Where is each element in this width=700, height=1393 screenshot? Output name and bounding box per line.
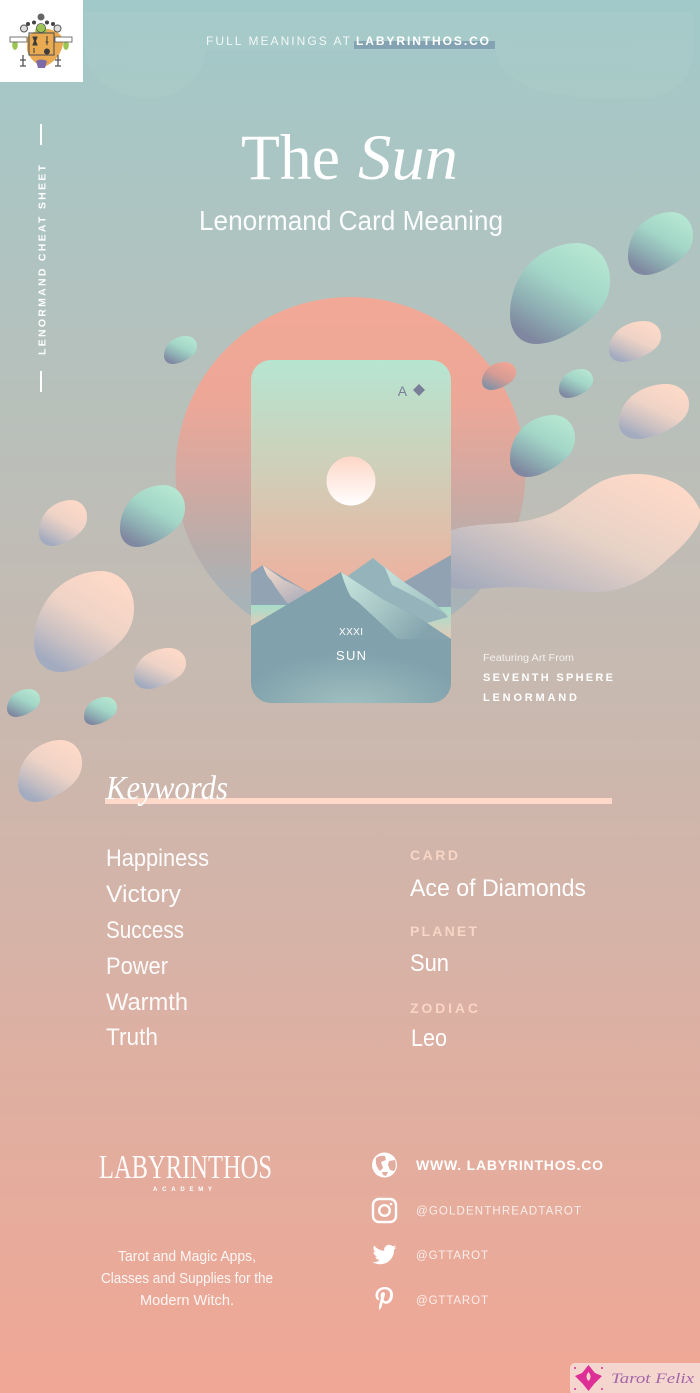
- tarot card: [251, 360, 451, 703]
- icon: pinterest: [376, 1287, 393, 1310]
- lit mountain face: [341, 572, 451, 639]
- card attributes: Ace of Diamonds: [410, 875, 586, 902]
- header link: [206, 34, 495, 49]
- header link: LABYRINTHOS.CO: [356, 34, 489, 48]
- link highlight: [354, 41, 495, 49]
- pinterest handle: @GTTAROT: [416, 1295, 488, 1307]
- logo badge: [0, 0, 83, 82]
- labyrinthos logo: LABYRINTHOS: [99, 1149, 272, 1186]
- tagline: Tarot and Magic Apps,: [118, 1248, 256, 1265]
- rank and suit: A: [398, 383, 408, 399]
- art credit: SEVENTH SPHERE: [483, 672, 613, 684]
- tarot felix badge: [570, 1363, 700, 1393]
- floating blobs: [7, 212, 693, 802]
- front mountain: [251, 572, 451, 703]
- website link: WWW. LABYRINTHOS.CO: [416, 1157, 603, 1173]
- card attributes: [410, 847, 586, 1052]
- card name: SUN: [336, 648, 366, 663]
- halftone header texture: [85, 12, 693, 99]
- card attributes: CARD: [410, 847, 458, 863]
- tagline: [101, 1248, 273, 1309]
- keyword list: Warmth: [106, 989, 188, 1016]
- labyrinthos logo: ACADEMY: [153, 1187, 212, 1193]
- emblem: [10, 14, 72, 68]
- tagline: Modern Witch.: [140, 1292, 234, 1309]
- keywords heading: [105, 770, 612, 807]
- keyword list: [106, 845, 209, 1051]
- tagline: Classes and Supplies for the: [101, 1270, 273, 1287]
- tarot felix badge: Tarot Felix: [611, 1371, 694, 1387]
- card sky: [251, 360, 451, 703]
- icon: instagram: [373, 1199, 396, 1222]
- card attributes: PLANET: [410, 923, 477, 939]
- keyword list: Truth: [106, 1024, 158, 1051]
- keyword list: Happiness: [106, 845, 209, 872]
- art credit: [483, 652, 613, 704]
- lotus mark: [574, 1365, 603, 1391]
- back mountains and water: [251, 555, 451, 640]
- title: The: [241, 122, 340, 194]
- art credit: Featuring Art From: [483, 652, 574, 664]
- title: Sun: [358, 122, 458, 194]
- heading underline: [105, 798, 612, 804]
- instagram handle: @GOLDENTHREADTAROT: [416, 1206, 581, 1218]
- card attributes: Sun: [410, 950, 449, 977]
- sun disc: [176, 297, 526, 647]
- keyword list: Success: [106, 917, 184, 944]
- header link: FULL MEANINGS AT: [206, 34, 351, 48]
- labyrinthos logo: [99, 1149, 272, 1193]
- subtitle: Lenormand Card Meaning: [199, 205, 503, 236]
- card attributes: ZODIAC: [410, 1000, 478, 1016]
- flowing wave shape: [445, 474, 700, 592]
- card sun: [326, 456, 376, 506]
- keyword list: Victory: [106, 881, 181, 908]
- twitter handle: @GTTAROT: [416, 1250, 488, 1262]
- keywords heading: Keywords: [105, 770, 228, 807]
- card attributes: Leo: [411, 1025, 447, 1052]
- rank and suit: [398, 383, 425, 399]
- card number: XXXI: [339, 627, 363, 638]
- sidebar label: LENORMAND CHEAT SHEET: [36, 164, 48, 355]
- icon: globe: [372, 1152, 397, 1178]
- icon: twitter: [372, 1245, 396, 1264]
- art credit: LENORMAND: [483, 692, 577, 704]
- keyword list: Power: [106, 953, 168, 980]
